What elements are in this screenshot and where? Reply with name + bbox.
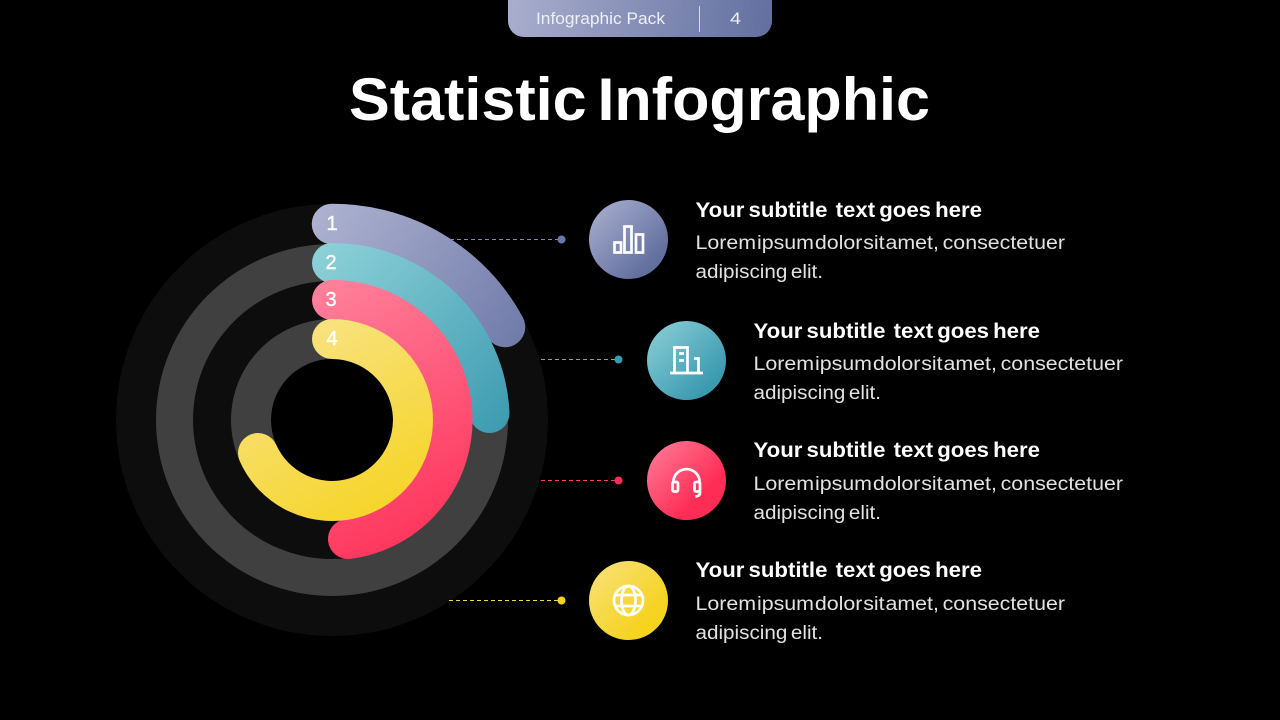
body text 3: Lorem ipsum dolor sit amet, consectetuer [754,474,1124,495]
body text 2: adipiscing elit. [754,383,881,404]
header tab: Infographic Pack 4: 4 [730,9,741,28]
radial bar chart [116,204,548,636]
item 2 [647,319,1124,404]
body text 2 [754,354,1124,404]
body text 2: Lorem ipsum dolor sit amet, consectetuer [754,354,1124,375]
number 2: 2 [325,252,337,274]
connector 2 [541,356,622,364]
arc 2: teal [332,263,490,413]
body text 1: Lorem ipsum dolor sit amet, consectetuer [696,233,1066,254]
number 4: 4 [326,328,338,350]
arc 1: slate [332,224,505,327]
icon: globe [589,561,668,640]
connector 3 [541,476,622,484]
subtitle 1: Your subtitle text goes here [696,198,982,222]
item 1 [589,198,1066,283]
body text 1 [696,233,1066,283]
subtitle 2: Your subtitle text goes here [754,319,1040,343]
body text 4: Lorem ipsum dolor sit amet, consectetuer [696,594,1066,615]
icon: headset [647,441,726,520]
body text 4 [696,594,1066,644]
body text 4: adipiscing elit. [696,623,823,644]
arc 4: yellow [258,339,413,501]
number 3: 3 [325,289,337,311]
subtitle 3: Your subtitle text goes here [754,438,1040,462]
body text 3 [754,474,1124,524]
body text 1: adipiscing elit. [696,262,823,283]
item 4 [589,558,1066,644]
connector 4 [449,596,566,604]
header tab: Infographic Pack 4: Infographic Pack [536,9,665,28]
arc 3: red [332,300,453,539]
connector 1 [450,236,566,244]
title: Statistic Infographic [349,66,930,133]
icon: bar chart [589,200,668,279]
number 1: 1 [326,213,338,235]
chart background rings [116,204,548,636]
item 3 [647,438,1124,524]
subtitle 4: Your subtitle text goes here [696,558,982,582]
icon: building [647,321,726,400]
header tab: Infographic Pack 4 [508,0,772,37]
body text 3: adipiscing elit. [754,503,881,524]
